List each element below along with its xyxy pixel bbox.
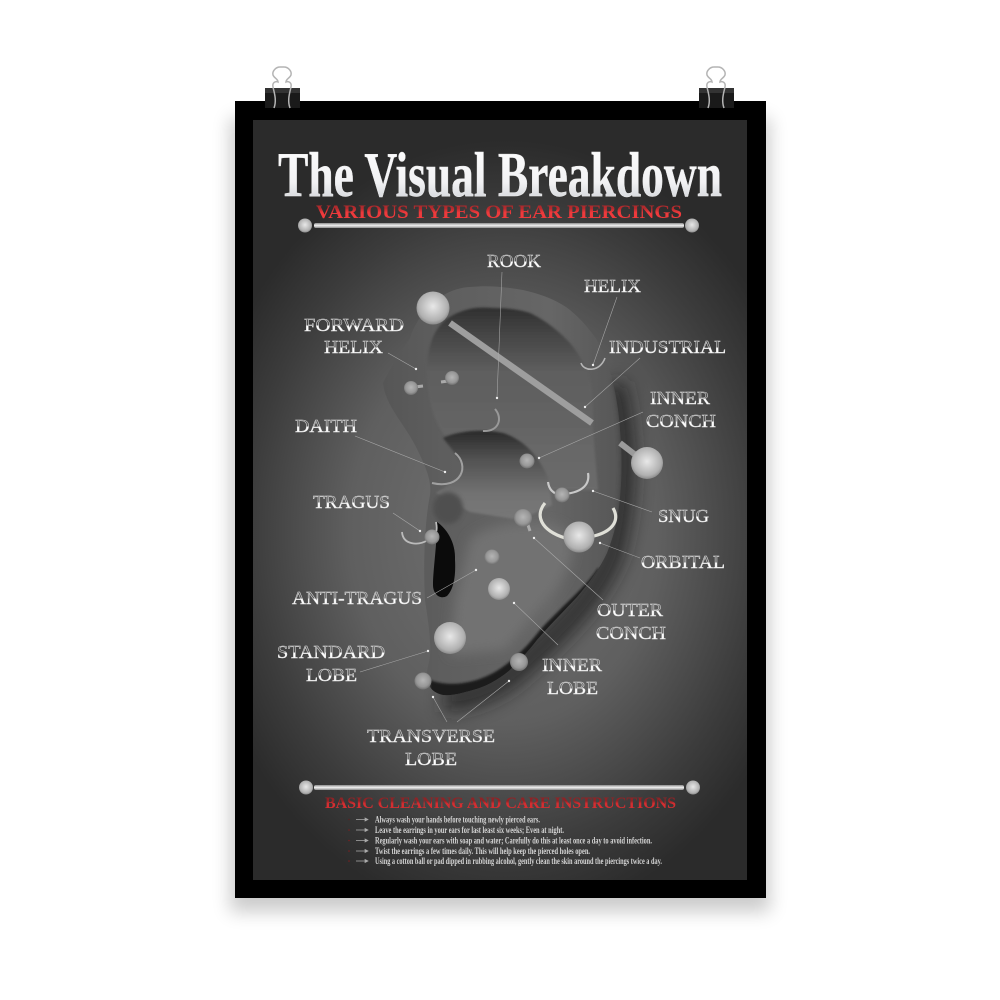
piercing: orbital [540,503,616,552]
bottom barbell [299,780,700,794]
top barbell [298,218,699,232]
piercing: snug [548,473,588,502]
title: The Visual Breakdown [278,140,722,210]
ear canal shadow [433,492,463,524]
list markers and arrows [348,818,368,862]
label: transverse lobe [367,726,495,769]
label: snug: SNUG [658,506,709,526]
label: inner conch: CONCH [646,411,716,431]
piercing: rook ring [483,409,499,431]
piercing: forward helix studs [404,371,459,395]
label: forward helix: HELIX [324,337,383,357]
lobe under crescent [430,568,599,696]
lower bowl [450,523,572,655]
label: tragus: TRAGUS [313,492,390,512]
label: orbital: ORBITAL [641,552,725,572]
instructions list: Leave the earrings in your ears for last least six weeks; Even at night. [375,825,564,835]
label: forward helix: FORWARD [304,315,404,335]
label: inner lobe: INNER [542,655,602,675]
label: outer conch: CONCH [596,623,666,643]
piercing: conch stud [514,509,532,531]
piercing: tragus [402,522,440,544]
instructions list: Always wash your hands before touching newly pierced ears. [375,814,540,824]
instructions list: Twist the earrings a few times daily. This will help keep the pierced holes open. [375,846,590,856]
label: inner conch [646,388,716,431]
ear cast shadow [443,383,623,699]
outer rim shade [612,383,622,528]
piercing: inner conch stud [520,454,534,468]
label: anti-tragus: ANTI-TRAGUS [292,588,422,608]
label: rook: ROOK [487,251,541,271]
instructions list: Regularly wash your ears with soap and water; Carefully do this at least once a day to avoid infection. [375,836,652,846]
ear body [383,286,622,695]
label: industrial: INDUSTRIAL [609,337,726,357]
label: outer conch: OUTER [597,600,663,620]
piercing: transverse lobe [414,653,528,690]
piercing: standard lobe [434,622,466,654]
subtitle: VARIOUS TYPES OF EAR PIERCINGS [316,202,682,223]
ear illustration [383,286,640,705]
label: transverse lobe: LOBE [405,749,457,769]
label: standard lobe: LOBE [306,665,357,685]
piercing: anti-tragus stud [484,550,500,564]
ear inner shading [429,306,622,696]
piercing: inner conch lower stud [488,578,510,600]
label: inner lobe [542,655,602,698]
instructions list: Using a cotton ball or pad dipped in rubbing alcohol, gently clean the skin around the piercings twice a day. [375,856,662,866]
label: outer conch [596,600,666,643]
label: transverse lobe: TRANSVERSE [367,726,495,746]
label: standard lobe: STANDARD [277,642,385,662]
heading: care instructions: BASIC CLEANING AND CARE INSTRUCTIONS [325,795,676,812]
label: standard lobe [277,642,385,685]
label: inner conch: INNER [650,388,710,408]
label: helix: HELIX [584,276,641,296]
label: daith: DAITH [295,416,357,436]
leader lines [355,272,652,722]
poster frame and panel [235,101,766,898]
label: forward helix [304,315,404,357]
piercing: forward helix top ball [416,292,450,324]
icon: binder clip left [265,67,300,108]
ear canal [433,522,455,597]
icon: binder clip right [699,67,734,108]
poster drop shadow [230,118,770,912]
piercing: industrial barbell [450,323,663,479]
helix inner arch [427,308,598,490]
concha hollow [436,431,552,520]
piercing: daith ring [432,453,462,484]
leader dots [415,364,601,698]
label: inner lobe: LOBE [547,678,598,698]
instructions list [348,814,662,866]
piercing: helix ring [581,358,605,369]
